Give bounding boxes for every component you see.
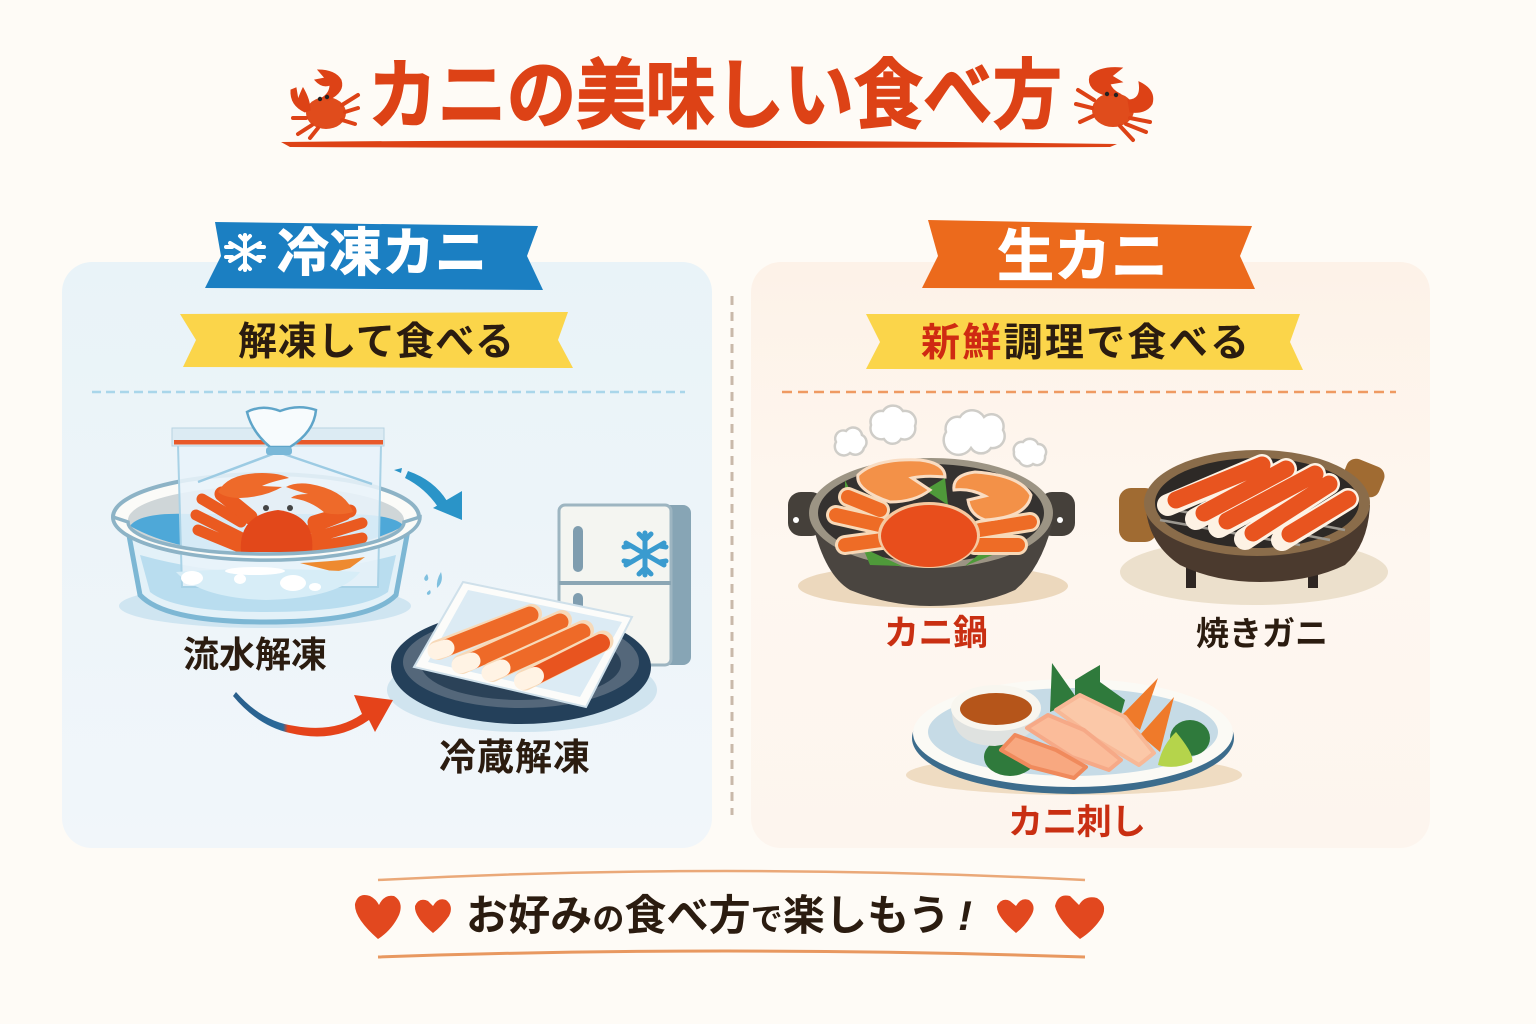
- sauce bowl: [952, 708, 1040, 746]
- tray: [414, 582, 632, 707]
- panel: fresh crab: [751, 220, 1430, 848]
- freezer bag: [172, 407, 384, 587]
- label: running water thaw: 流水解凍: [183, 634, 327, 675]
- illustration: grilled crab: [1119, 450, 1388, 605]
- arrow: running water to refrigerated thaw: [233, 692, 393, 736]
- illustration: running water thaw: [113, 407, 420, 628]
- ribbon: fresh crab heading: 生カニ: [997, 225, 1168, 289]
- ribbon: thaw subheading: 解凍して食べる: [238, 321, 514, 364]
- panel background: [62, 262, 712, 848]
- icon: left crab: [291, 70, 358, 138]
- crab sashimi pieces: [1001, 695, 1154, 778]
- icon: refrigerator: [559, 505, 691, 665]
- ribbon: fresh crab heading: [922, 220, 1255, 289]
- grilled crab legs: [1168, 465, 1348, 540]
- footer text: お好みの食べ方で楽しもう: [466, 892, 950, 939]
- icon: splash: [424, 572, 442, 595]
- title: [281, 54, 1153, 148]
- arrow: water to refrigerator: [394, 468, 462, 520]
- crab in bag: [196, 473, 362, 552]
- ribbon: thaw subheading: [180, 312, 573, 368]
- title text: カニの美味しい食べ方: [368, 54, 1062, 139]
- carrot garnish: [1121, 678, 1158, 730]
- icon: steam: [835, 406, 1046, 466]
- illustration: crab sashimi: [906, 663, 1242, 795]
- illustration: refrigerator thaw plate: [387, 582, 657, 732]
- panel background: [751, 262, 1430, 848]
- illustration: crab hot pot: [788, 458, 1075, 608]
- label: crab hot pot: カニ鍋: [884, 614, 988, 653]
- icon: fridge snowflake: [624, 533, 666, 575]
- label: crab sashimi: カニ刺し: [1008, 803, 1146, 842]
- icon: right crab: [1076, 68, 1153, 140]
- label: refrigerator thaw: 冷蔵解凍: [439, 737, 590, 778]
- panel: frozen crab: [62, 222, 712, 848]
- crab sticks: [436, 614, 603, 681]
- footer exclamation: !: [958, 892, 972, 939]
- ribbon: fresh cooking subheading: [866, 314, 1303, 370]
- title underline: [281, 140, 1117, 148]
- basin front rim: [113, 517, 420, 560]
- ribbon: fresh cooking subheading: 新鮮調理で食べる: [921, 322, 1249, 365]
- footer message: [355, 871, 1104, 957]
- icon: heading snowflake: [226, 235, 264, 270]
- label: grilled crab: 焼きガニ: [1196, 615, 1328, 652]
- ribbon: frozen crab heading: [205, 222, 543, 290]
- heading text: 冷凍カニ: [277, 225, 487, 283]
- icon: hearts: [355, 895, 1104, 939]
